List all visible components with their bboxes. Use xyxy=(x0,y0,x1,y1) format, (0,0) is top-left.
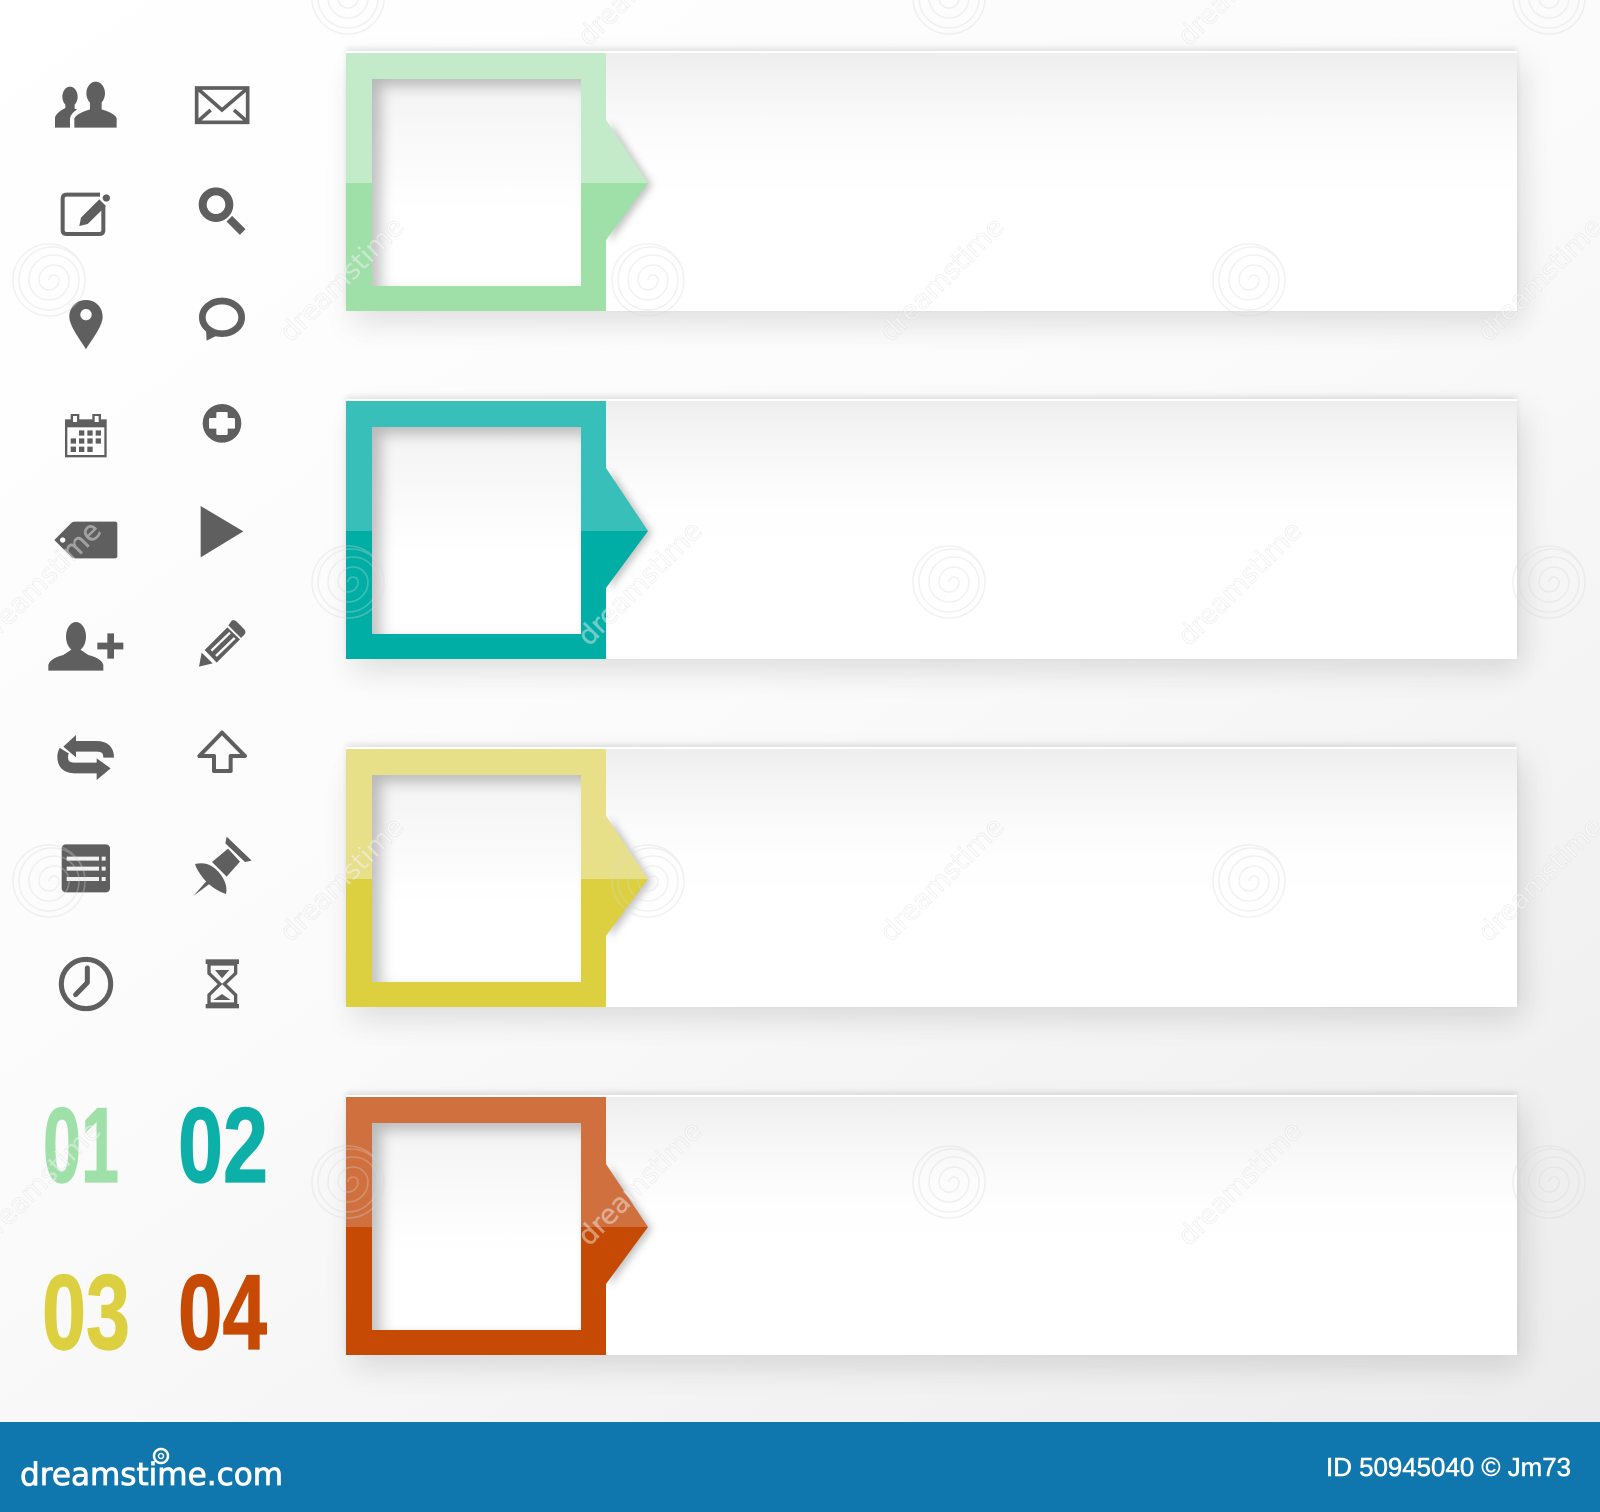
watermark text: dreamstime xyxy=(874,211,1011,348)
footer bar xyxy=(0,1422,1600,1512)
icon: repeat arrows xyxy=(63,735,111,780)
icon: calendar xyxy=(65,414,107,457)
icon: clock xyxy=(61,959,111,1009)
watermark text: dreamstime xyxy=(1172,1115,1309,1252)
icon: magnifier xyxy=(203,191,243,232)
panel: banner 1 (green) xyxy=(346,51,1517,311)
icon: map pin xyxy=(69,300,103,349)
watermark text: dreamstime xyxy=(1172,515,1309,652)
number 02: 02 xyxy=(178,1085,268,1205)
icon: list xyxy=(62,844,110,892)
icon: pencil xyxy=(199,620,245,667)
icon: push pin xyxy=(193,837,252,896)
arrow pointer 2 xyxy=(606,468,654,589)
number 04: 04 xyxy=(178,1252,267,1372)
square frame 4 xyxy=(346,1097,606,1355)
icon: users xyxy=(55,82,117,128)
arrow pointer 1 xyxy=(606,120,654,241)
icon: up arrow xyxy=(199,733,245,771)
arrow pointer 3 xyxy=(606,816,654,937)
watermark text: dreamstime xyxy=(874,811,1011,948)
icon: note with pencil xyxy=(63,194,110,234)
panel: banner 3 (yellow) xyxy=(346,747,1517,1007)
square frame 2 xyxy=(346,401,606,659)
number badges xyxy=(42,1085,268,1372)
icon: envelope xyxy=(197,88,248,122)
footer logo: dreamstime.com xyxy=(20,1457,283,1493)
square frame 1 xyxy=(346,53,606,311)
icon: speech bubble xyxy=(202,301,242,341)
icon: plus circle xyxy=(203,404,241,443)
watermark text: dreamstime xyxy=(274,211,411,348)
icon grid xyxy=(48,82,252,1009)
icon: play xyxy=(201,506,243,557)
panel: banner 4 (orange) xyxy=(346,1095,1517,1355)
number 03: 03 xyxy=(42,1252,130,1372)
watermark text: dreamstime xyxy=(572,515,709,652)
icon: price tag xyxy=(54,522,117,558)
footer image id: ID 50945040 © Jm73 xyxy=(1326,1452,1571,1482)
icon: add user xyxy=(48,622,123,671)
square frame 3 xyxy=(346,749,606,1007)
panel: banner 2 (teal) xyxy=(346,399,1517,659)
arrow pointer 4 xyxy=(606,1164,654,1285)
watermark text: dreamstime xyxy=(274,811,411,948)
watermark spirals xyxy=(13,0,1585,1218)
number 01: 01 xyxy=(43,1085,119,1205)
watermark text: dreamstime xyxy=(572,1115,709,1252)
icon: hourglass xyxy=(206,959,239,1008)
